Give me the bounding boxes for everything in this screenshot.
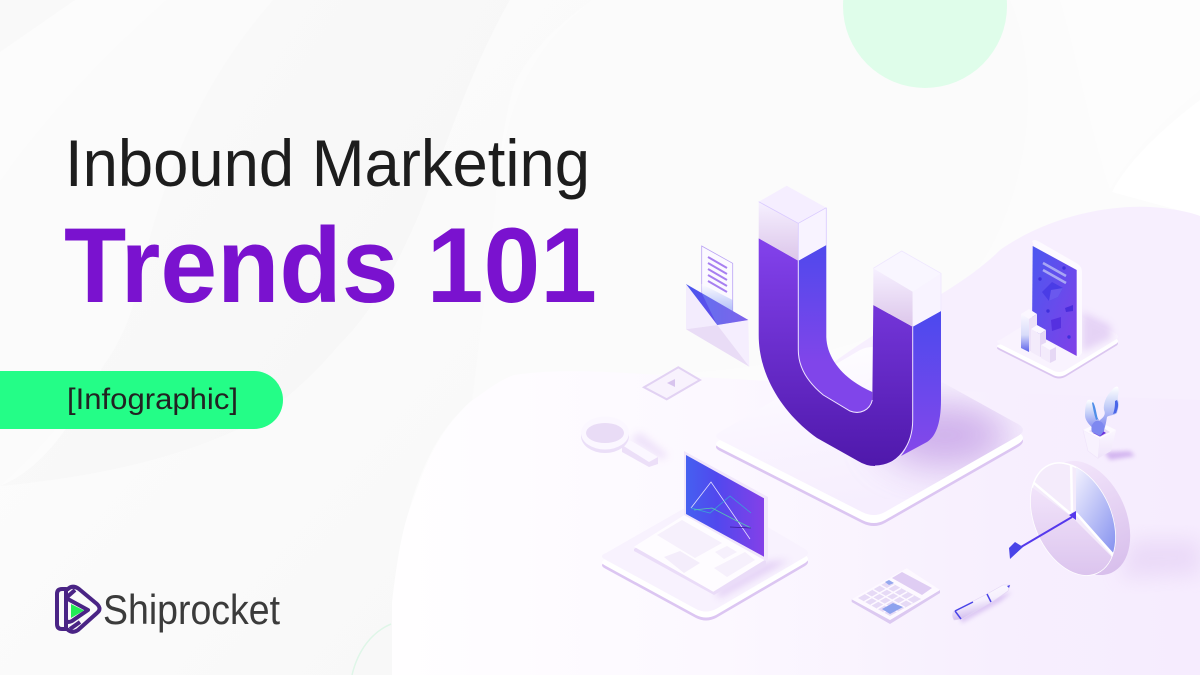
- icon: envelope with letter: [686, 246, 749, 367]
- decorative green circle: [843, 0, 1007, 88]
- icon: magnifying glass: [581, 416, 668, 467]
- phone platform: [997, 309, 1118, 378]
- magnifier handle: [622, 440, 658, 467]
- laptop screen: [684, 451, 768, 561]
- laptop: [634, 451, 768, 595]
- magnet front: [759, 238, 913, 466]
- icon: pen: [952, 585, 1012, 623]
- icon: small image tile: [644, 367, 700, 399]
- lilac lower mound: [392, 371, 1200, 675]
- title line 2: Trends 101: [64, 205, 597, 325]
- bottom slice: [1030, 488, 1112, 576]
- screen chart: [691, 482, 751, 539]
- magnet inner side: [798, 245, 872, 412]
- phone: [1032, 240, 1082, 358]
- laptop base: [634, 516, 766, 595]
- arrow: [1009, 511, 1076, 559]
- lilac right mound: [790, 207, 1200, 675]
- phone cubes: [1038, 266, 1073, 339]
- left cap: [759, 186, 826, 261]
- laptop platform: [602, 505, 808, 620]
- icon: calculator: [852, 568, 940, 624]
- icon: potted plant: [1083, 387, 1135, 460]
- Shiprocket logo: Shiprocket: [103, 586, 280, 633]
- magnet: [759, 186, 941, 466]
- pie chart: [1009, 461, 1200, 578]
- magnet outer side: [901, 311, 941, 456]
- logo play icon: [57, 587, 100, 632]
- title line 1: Inbound Marketing: [65, 126, 590, 200]
- blue slice: [1076, 468, 1116, 552]
- right cap: [873, 251, 941, 327]
- central platform: [716, 347, 1023, 526]
- keyboard: [657, 520, 722, 558]
- platform shadow: [880, 403, 1010, 467]
- bar chart: [1021, 309, 1056, 363]
- plant leaves: [1085, 400, 1101, 434]
- letter: [702, 246, 733, 318]
- faint green arc: [352, 624, 391, 675]
- pie face: [1014, 450, 1132, 588]
- infographic tag pill: [Infographic]: [67, 383, 238, 416]
- pie body: [1027, 447, 1147, 589]
- plant pot: [1083, 430, 1100, 458]
- infographic tag pill: [0, 371, 283, 429]
